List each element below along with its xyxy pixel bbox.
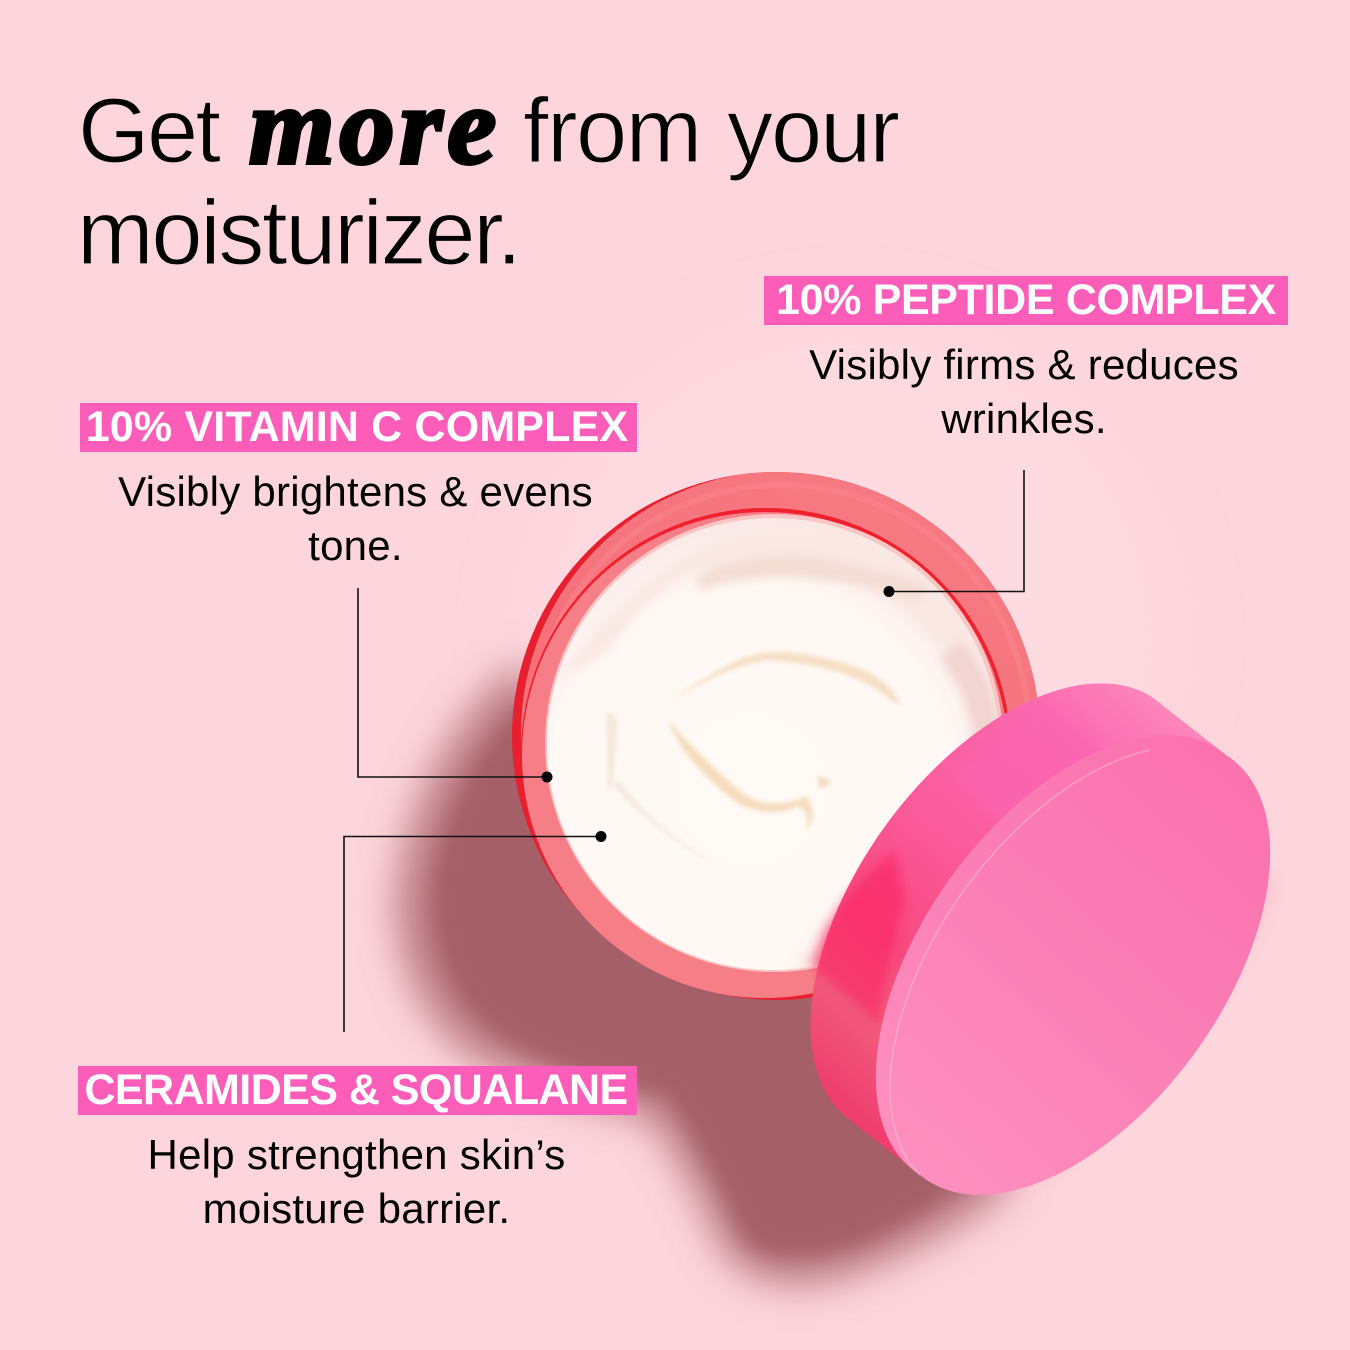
product photo: jar and lid bbox=[372, 472, 1272, 1309]
description: peptide bbox=[809, 341, 1239, 442]
title: moisturizer. bbox=[77, 182, 520, 284]
cream bbox=[547, 518, 999, 970]
jar rim bbox=[521, 472, 1038, 746]
background glow bbox=[540, 330, 1160, 950]
lid band highlight bbox=[953, 705, 1110, 825]
lid side bbox=[810, 683, 1226, 1175]
rim highlight bbox=[533, 485, 1029, 981]
leader: peptide bbox=[884, 470, 1024, 597]
lid bbox=[810, 683, 1270, 1195]
callout: peptide complex bbox=[764, 276, 1288, 442]
red inner ring bbox=[521, 508, 1011, 998]
cream swirls bbox=[560, 530, 998, 985]
lid reflection glow bbox=[1010, 880, 1262, 1180]
lid face edge highlight bbox=[890, 750, 1150, 1175]
title: Get bbox=[78, 80, 218, 182]
jar inner wall bbox=[522, 512, 1008, 998]
description: ceramides: moisture barrier. bbox=[203, 1185, 510, 1232]
inner wall pale band bbox=[545, 514, 1003, 972]
lid deep red reflection bbox=[812, 850, 905, 1025]
title: your bbox=[727, 80, 898, 182]
description: peptide: Visibly firms & reduces bbox=[809, 341, 1239, 388]
description: peptide: wrinkles. bbox=[941, 395, 1107, 442]
leader: vitamin c bbox=[358, 588, 552, 782]
description: vitamin c bbox=[118, 468, 593, 569]
title bbox=[77, 65, 898, 284]
drop shadow bbox=[397, 660, 1015, 1284]
description: vitamin c: Visibly brightens & evens bbox=[118, 468, 593, 515]
jar bbox=[512, 471, 1045, 1000]
title: more bbox=[249, 65, 501, 187]
title: from bbox=[523, 80, 701, 182]
lid face bbox=[876, 735, 1270, 1195]
description: ceramides: Help strengthen skin’s bbox=[148, 1131, 565, 1178]
tag: peptide: 10% PEPTIDE COMPLEX bbox=[776, 276, 1276, 324]
description: vitamin c: tone. bbox=[308, 522, 403, 569]
description: ceramides bbox=[148, 1131, 565, 1232]
tag: vitamin c: 10% VITAMIN C COMPLEX bbox=[86, 403, 628, 451]
leader: ceramides bbox=[344, 831, 606, 1032]
callout: ceramides and squalane bbox=[78, 1066, 637, 1232]
jar outer red edge bbox=[512, 472, 1040, 1000]
callout: vitamin c complex bbox=[80, 403, 637, 569]
tag: ceramides: CERAMIDES & SQUALANE bbox=[84, 1066, 628, 1114]
